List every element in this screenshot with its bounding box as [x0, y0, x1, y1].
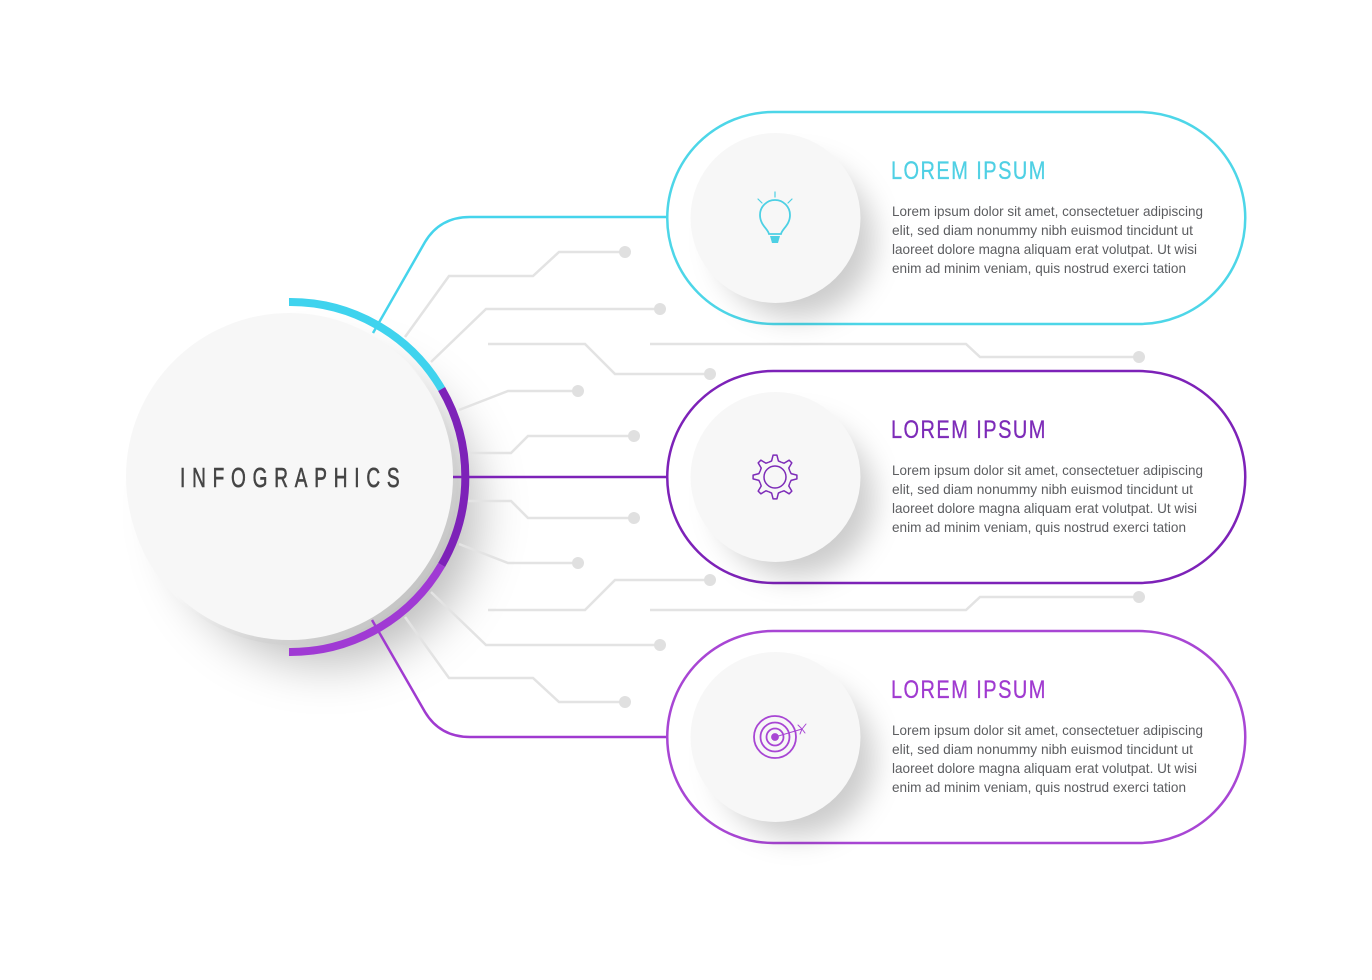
circuit lines: lower group — [405, 501, 1145, 708]
body text — [892, 722, 1203, 795]
body text: Lorem ipsum dolor sit amet, consectetuer adipiscing — [892, 462, 1203, 478]
ring segment: magenta — [289, 565, 442, 652]
body text — [892, 462, 1203, 535]
panel: first item — [667, 112, 1245, 324]
panel: second item — [667, 371, 1245, 583]
body text: elit, sed diam nonummy nibh euismod tincidunt ut — [892, 741, 1193, 757]
body text: laoreet dolore magna aliquam erat volutpat. Ut wisi — [892, 241, 1197, 257]
ring segment: cyan — [289, 302, 442, 389]
icon disc — [690, 133, 860, 303]
connector: magenta — [372, 620, 668, 737]
main circle with title — [126, 313, 457, 645]
body text: Lorem ipsum dolor sit amet, consectetuer adipiscing — [892, 722, 1203, 738]
body text: laoreet dolore magna aliquam erat volutpat. Ut wisi — [892, 500, 1197, 516]
icon disc shadow — [718, 681, 874, 837]
body text: elit, sed diam nonummy nibh euismod tincidunt ut — [892, 222, 1193, 238]
body text: Lorem ipsum dolor sit amet, consectetuer adipiscing — [892, 203, 1203, 219]
pill outline — [667, 112, 1245, 324]
heading: LOREM IPSUM — [891, 676, 1045, 704]
ring segment: purple — [442, 389, 465, 565]
circuit lines: upper group — [405, 246, 1145, 453]
body text: enim ad minim veniam, quis nostrud exerci tation — [892, 260, 1186, 276]
icon disc shadow — [718, 421, 874, 577]
title: INFOGRAPHICS — [180, 462, 400, 494]
body text: enim ad minim veniam, quis nostrud exerci tation — [892, 519, 1186, 535]
body text: elit, sed diam nonummy nibh euismod tincidunt ut — [892, 481, 1193, 497]
main circle shadow — [174, 360, 478, 664]
heading: LOREM IPSUM — [891, 416, 1045, 444]
pill outline — [667, 371, 1245, 583]
icon: target — [754, 716, 806, 758]
heading: LOREM IPSUM — [891, 157, 1045, 185]
icon disc — [690, 652, 860, 822]
connector: purple — [453, 476, 668, 478]
panel: third item — [667, 631, 1245, 843]
segmented ring — [289, 302, 465, 652]
body text: enim ad minim veniam, quis nostrud exerci tation — [892, 779, 1186, 795]
icon disc — [690, 392, 860, 562]
icon: gear — [753, 455, 797, 499]
icon: light bulb — [758, 192, 792, 243]
icon disc shadow — [718, 162, 874, 318]
connector: cyan — [373, 217, 668, 333]
body text — [892, 203, 1203, 276]
pill outline — [667, 631, 1245, 843]
body text: laoreet dolore magna aliquam erat volutpat. Ut wisi — [892, 760, 1197, 776]
